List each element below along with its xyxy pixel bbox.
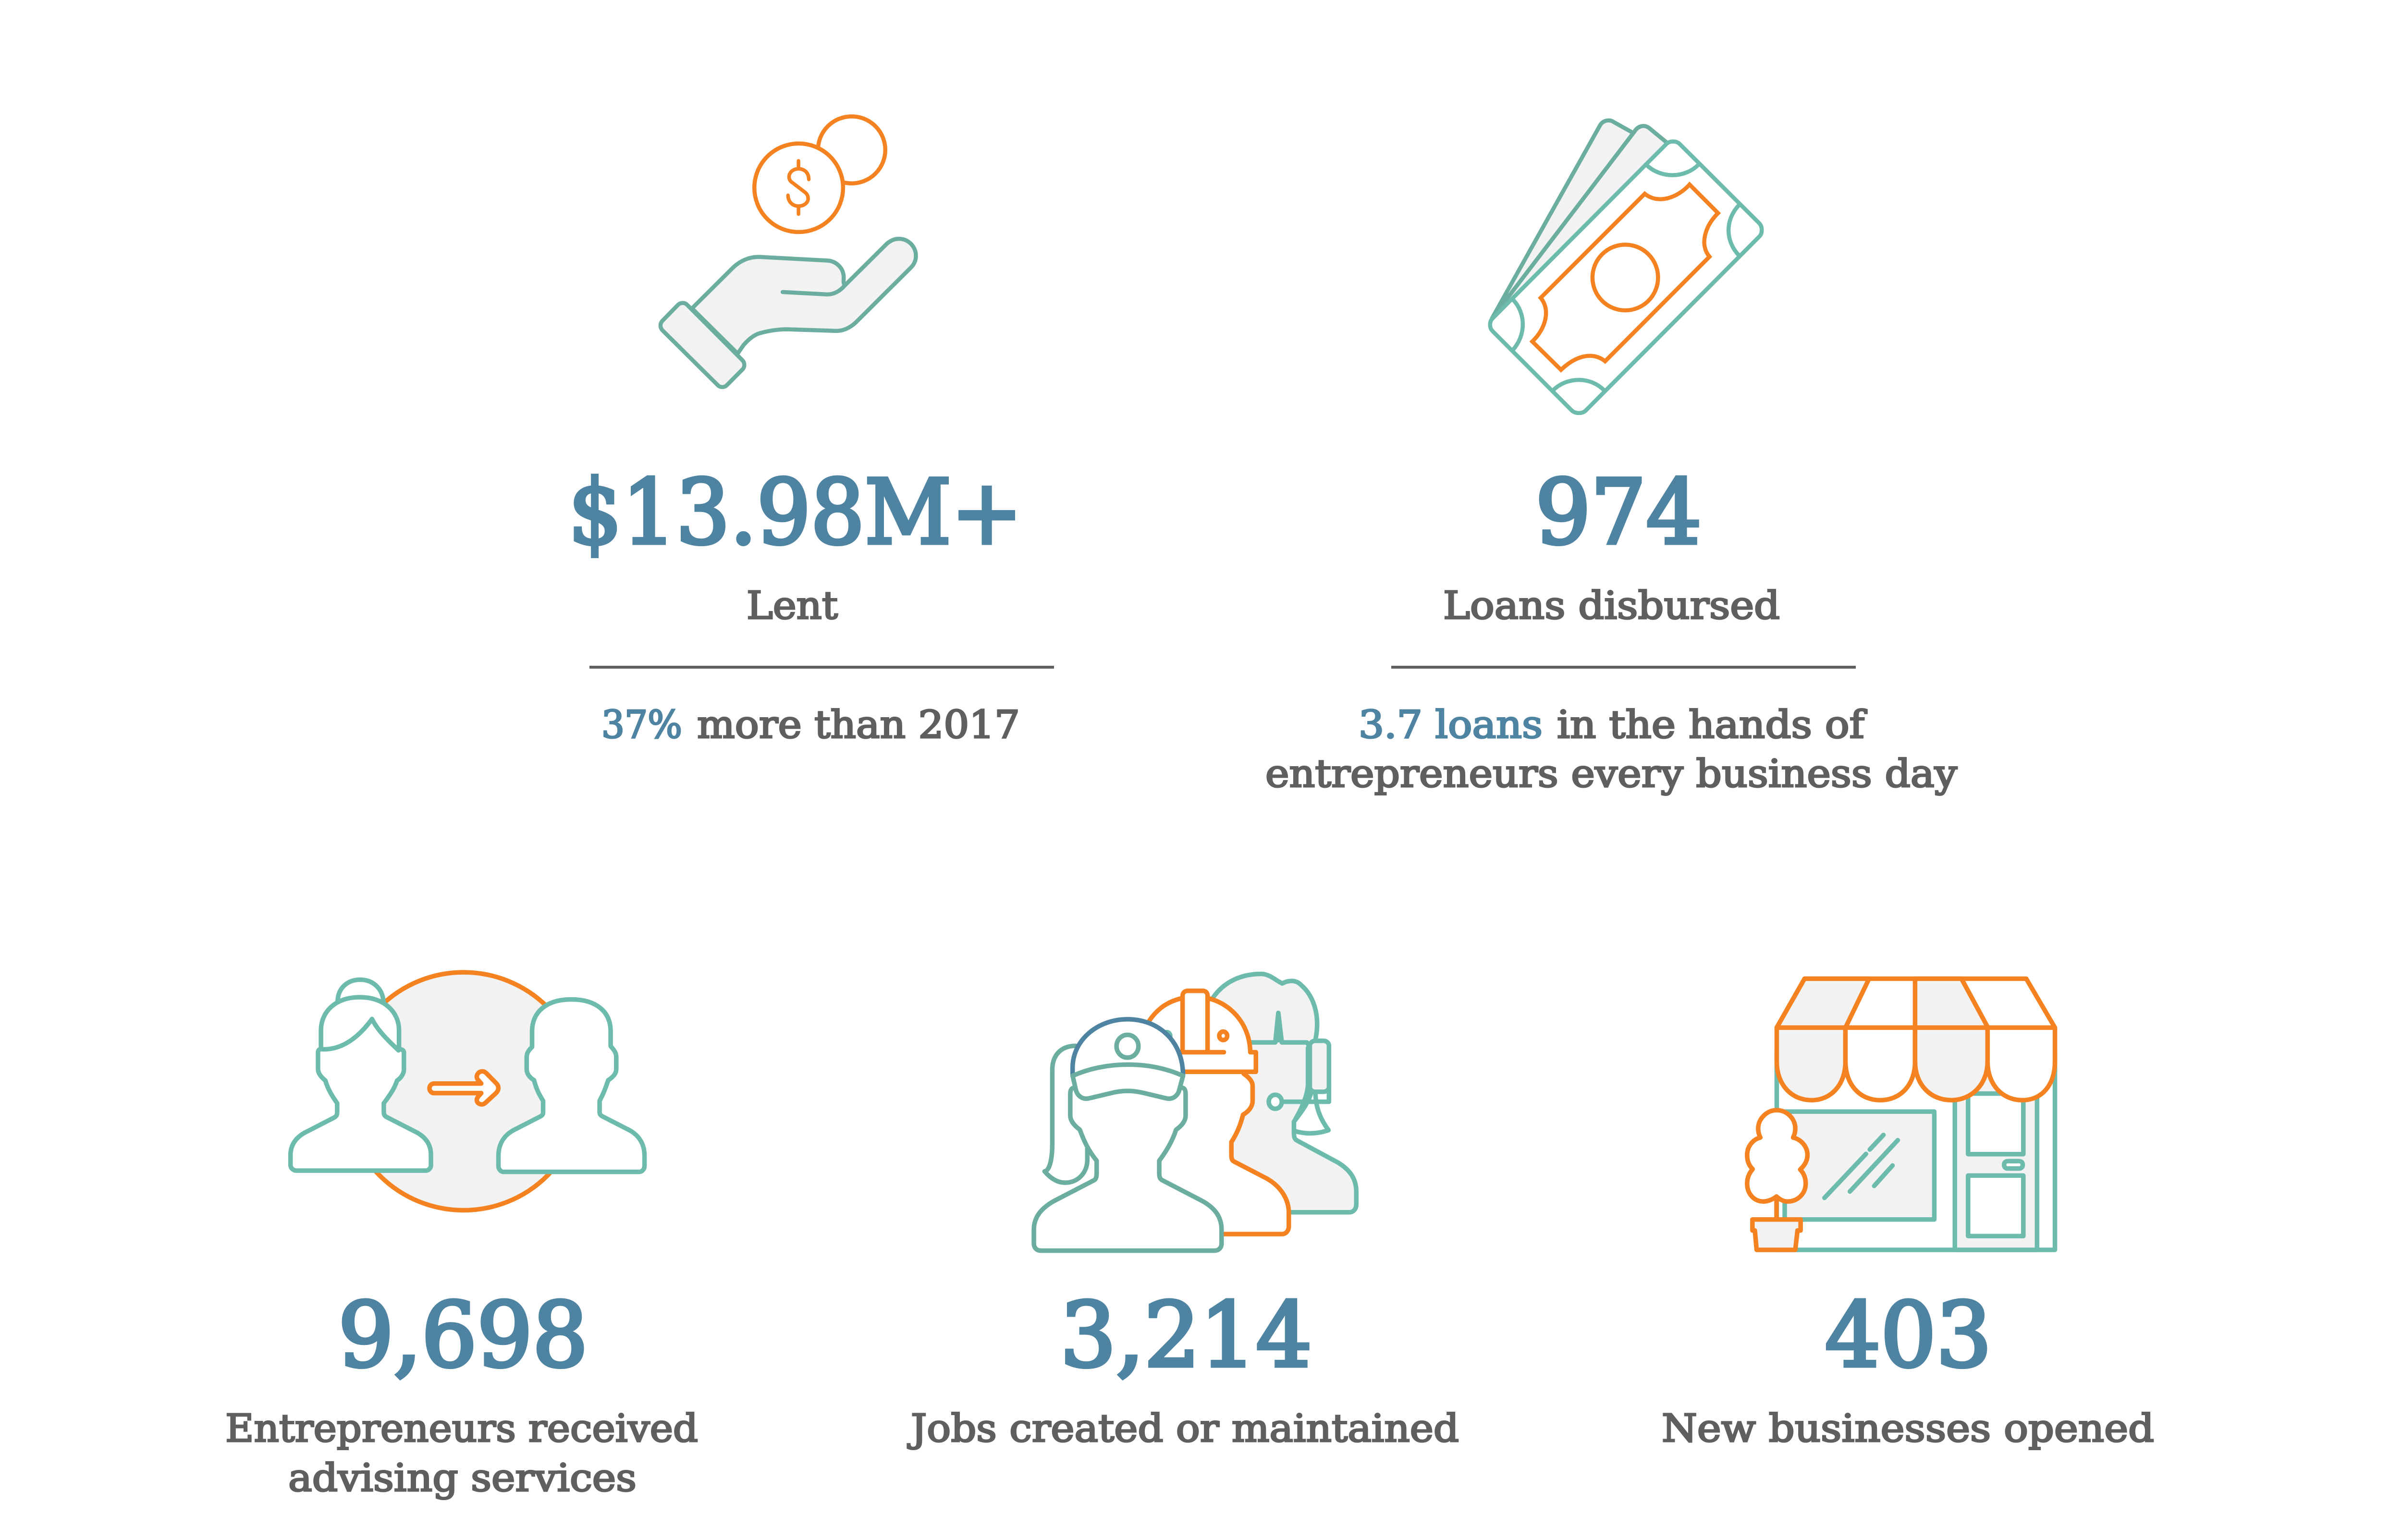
text: loans per business day: entrepreneurs every business day — [1265, 751, 1957, 796]
panel: jobs — [907, 974, 1459, 1451]
panel: new businesses — [1662, 978, 2154, 1451]
icon: awning — [1777, 978, 2055, 1100]
icon: worker with headset — [1182, 974, 1356, 1212]
label: entrepreneurs advised: advising services — [288, 1455, 637, 1500]
icon: advisor and entrepreneur with arrow — [291, 972, 645, 1210]
panel: advising services — [225, 972, 698, 1500]
icon: three workers — [1034, 974, 1356, 1251]
label: entrepreneurs advised — [225, 1406, 698, 1500]
icon: worker with cap — [1034, 1019, 1222, 1251]
heading: entrepreneurs count: 9,698 — [338, 1283, 588, 1387]
heading: amount lent: $13.98M+ — [568, 460, 1022, 564]
heading: loans count: 974 — [1535, 460, 1702, 564]
panel: loans disbursed — [1265, 121, 1957, 796]
heading: businesses count: 403 — [1825, 1283, 1992, 1387]
icon: storefront — [1747, 978, 2055, 1250]
text: comparison to 2017: 37% — [601, 702, 682, 747]
label: new businesses: New businesses opened — [1662, 1406, 2154, 1451]
text: loans per business day: in the hands of — [1557, 702, 1867, 747]
icon: arrow — [429, 1071, 498, 1104]
label: lent: Lent — [747, 583, 838, 628]
icon: worker with hard hat — [1135, 991, 1289, 1234]
text: loans per business day: 3.7 loans — [1359, 702, 1543, 747]
icon: potted tree — [1747, 1110, 1807, 1250]
icon: banknotes — [1490, 121, 1762, 413]
label: jobs: Jobs created or maintained — [907, 1406, 1459, 1451]
label: entrepreneurs advised: Entrepreneurs received — [225, 1406, 698, 1451]
text: comparison to 2017 — [601, 702, 1020, 747]
label: loans disbursed: Loans disbursed — [1443, 583, 1780, 628]
icon: hand with coins — [661, 116, 916, 387]
text: loans per business day — [1265, 702, 1957, 796]
heading: jobs count: 3,214 — [1060, 1283, 1312, 1387]
panel: amount lent — [568, 116, 1054, 747]
text: comparison to 2017: more than 2017 — [697, 702, 1020, 747]
